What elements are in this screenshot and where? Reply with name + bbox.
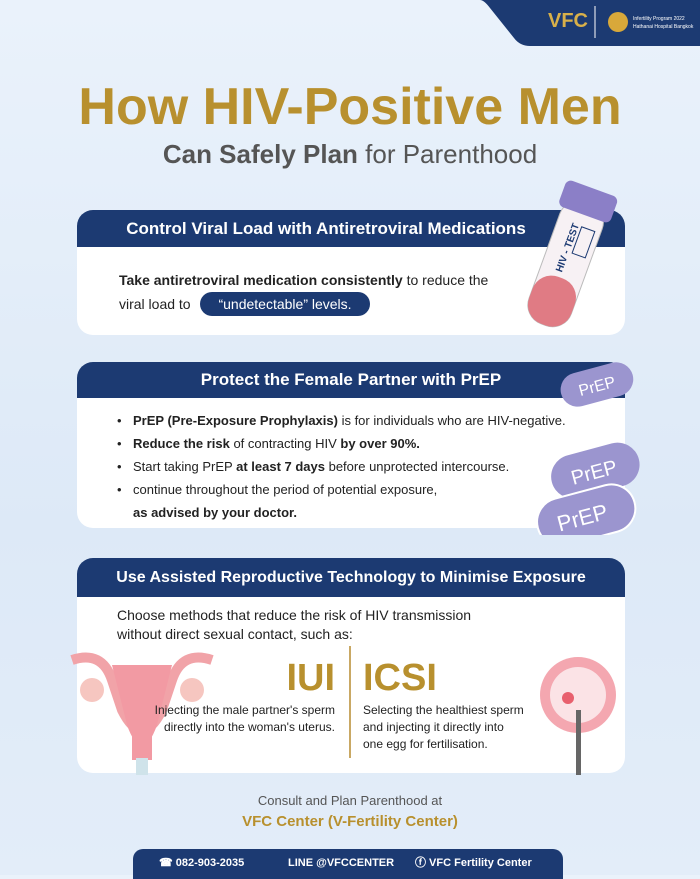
top banner: VFC bbox=[548, 10, 588, 32]
icon: PrEP pills bbox=[537, 362, 640, 535]
panel: ART: Use Assisted Reproductive Technology to Minimise Exposure bbox=[116, 569, 586, 586]
intro text: without direct sexual contact, such as: bbox=[117, 626, 353, 642]
panel: viral load: Control Viral Load with Antiretroviral Medications bbox=[126, 219, 526, 238]
text block: Take antiretroviral medication consistently to reduce the bbox=[119, 272, 488, 288]
bullet list: Reduce the risk of contracting HIV by over 90%. bbox=[133, 436, 420, 451]
intro text: Choose methods that reduce the risk of HIV transmission bbox=[117, 607, 471, 623]
bullet list: as advised by your doctor. bbox=[133, 505, 297, 520]
ICSI: one egg for fertilisation. bbox=[363, 737, 488, 751]
IUI bbox=[155, 657, 335, 734]
text block: viral load to bbox=[119, 296, 191, 312]
text block bbox=[119, 272, 488, 316]
icon: uterus bbox=[70, 652, 214, 775]
text: VFC Center (V-Fertility Center) bbox=[242, 813, 458, 830]
intro text bbox=[117, 607, 471, 642]
contact bar bbox=[133, 849, 563, 879]
panel: PrEP: Protect the Female Partner with PrEP bbox=[201, 370, 501, 389]
panel: PrEP bbox=[77, 362, 625, 528]
contact bar: ☎ 082-903-2035 bbox=[159, 857, 244, 869]
bullet list: PrEP (Pre-Exposure Prophylaxis) is for individuals who are HIV-negative. bbox=[133, 413, 566, 428]
icon: HIV test tube: HIV - TEST bbox=[554, 222, 582, 274]
text block: “undetectable” levels. bbox=[218, 296, 352, 312]
ICSI: ICSI bbox=[363, 657, 437, 699]
ICSI: Selecting the healthiest sperm bbox=[363, 703, 524, 717]
ICSI: and injecting it directly into bbox=[363, 720, 504, 734]
top banner: Infertility Program 2022 bbox=[633, 16, 685, 22]
IUI: directly into the woman's uterus. bbox=[164, 720, 335, 734]
bullet list bbox=[118, 413, 566, 520]
subtitle: Can Safely Plan for Parenthood bbox=[163, 139, 537, 169]
panel: viral load bbox=[77, 210, 625, 335]
icon: PrEP pills: PrEP bbox=[569, 456, 620, 490]
panel: ART bbox=[77, 558, 625, 773]
ICSI bbox=[363, 657, 524, 751]
bullet list: Start taking PrEP at least 7 days before unprotected intercourse. bbox=[133, 459, 509, 474]
footer text: Consult and Plan Parenthood at bbox=[258, 793, 442, 808]
bullet list: continue throughout the period of potential exposure, bbox=[133, 482, 437, 497]
icon: PrEP pills: PrEP bbox=[577, 374, 617, 400]
top banner bbox=[480, 0, 700, 46]
IUI: Injecting the male partner's sperm bbox=[155, 703, 335, 717]
IUI: IUI bbox=[286, 657, 335, 699]
contact bar: LINE @VFCCENTER bbox=[288, 857, 394, 869]
contact bar: ⓕ VFC Fertility Center bbox=[415, 857, 532, 869]
icon: egg with needle bbox=[540, 657, 616, 775]
icon: HIV test tube bbox=[527, 180, 618, 328]
title: How HIV-Positive Men bbox=[78, 78, 622, 136]
top banner: Hathanai Hospital Bangkok bbox=[633, 24, 694, 30]
